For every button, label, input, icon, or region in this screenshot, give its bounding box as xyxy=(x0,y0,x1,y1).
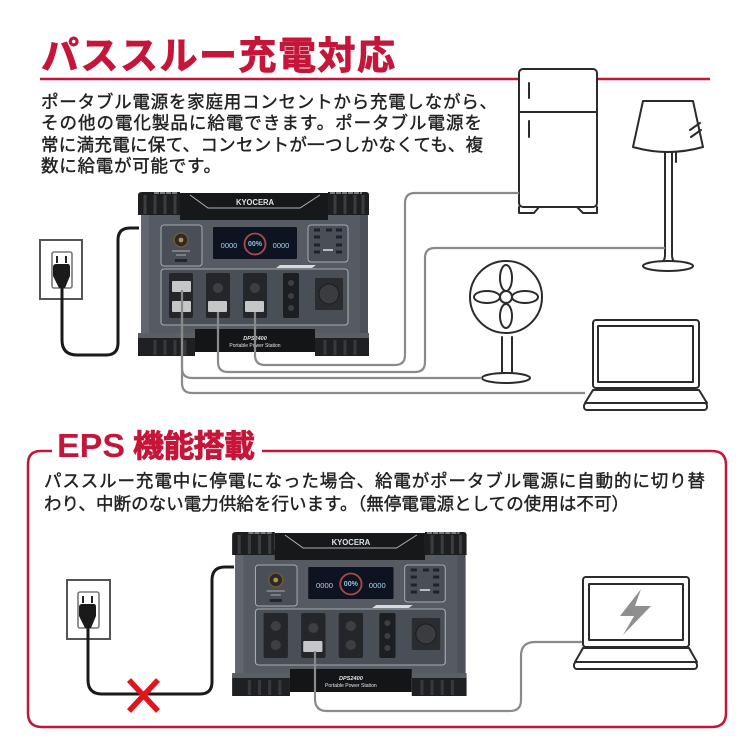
power station: upper xyxy=(138,192,369,356)
bottom base xyxy=(290,669,412,692)
icon: laptop xyxy=(584,320,707,410)
panel AC outlets xyxy=(255,609,445,665)
icon: refrigerator xyxy=(519,69,597,213)
intro text block xyxy=(41,92,497,176)
gray cord: lower xyxy=(315,642,583,711)
logo: KYOCERA xyxy=(332,538,370,547)
panel left xyxy=(255,565,297,606)
panel AC outlets xyxy=(161,269,348,325)
gray cords: upper xyxy=(182,193,665,393)
icon: floor lamp xyxy=(633,101,703,271)
EPS text block: パススルー充電中に停電になった場合、給電がポータブル電源に自動的に切り替 xyxy=(44,471,705,491)
logo: KYOCERA xyxy=(236,198,274,207)
power station: lower: 0000 xyxy=(369,581,386,590)
power station: lower: 0000 xyxy=(316,581,333,590)
title underline xyxy=(40,78,710,80)
display xyxy=(308,567,394,599)
EPS text block xyxy=(44,471,705,514)
title: pass-through charging: パススルー充電対応 xyxy=(41,36,395,78)
icon: red cross mark xyxy=(129,680,158,711)
EPS text block: わり、中断のない電力供給を行います。（無停電電源としての使用は不可） xyxy=(44,494,629,514)
icon: laptop with lightning bolt xyxy=(574,577,697,669)
display xyxy=(213,227,297,259)
plug xyxy=(303,641,322,652)
power station: upper: Portable Power Station xyxy=(229,343,281,349)
power station: lower: DPS2400 xyxy=(339,676,364,682)
bottom base xyxy=(195,329,315,352)
wall outlet: upper xyxy=(40,240,82,299)
top band xyxy=(275,533,425,560)
heading: EPS function xyxy=(57,427,255,464)
power station: upper: 0000 xyxy=(273,241,289,250)
housing xyxy=(141,210,368,338)
icon: electric fan xyxy=(470,261,542,383)
black cord: upper xyxy=(62,228,139,355)
heading: EPS function: EPS xyxy=(57,427,125,464)
intro text block: 数に給電が可能です。 xyxy=(41,156,221,176)
power station: lower: 00% xyxy=(344,581,359,588)
power station: upper: 0000 xyxy=(221,241,237,250)
power station: lower: Portable Power Station xyxy=(325,683,377,689)
panel right xyxy=(405,565,445,602)
housing xyxy=(235,550,466,678)
intro text block: ポータブル電源を家庭用コンセントから充電しながら、 xyxy=(41,92,497,112)
panel right xyxy=(308,225,348,262)
power station: lower xyxy=(232,532,467,696)
power station: upper: 00% xyxy=(248,241,263,248)
wall outlet: lower xyxy=(67,580,110,639)
plugs xyxy=(172,281,191,292)
intro text block: その他の電化製品に給電できます。ポータブル電源を xyxy=(41,113,482,133)
heading: EPS function: 機能搭載 xyxy=(133,429,255,464)
panel left xyxy=(161,225,202,266)
power station: upper: DPS2400 xyxy=(243,336,267,342)
intro text block: 常に満充電に保て、コンセントが一つしかなくても、複 xyxy=(41,135,484,155)
black cord: lower xyxy=(88,567,234,694)
EPS panel frame xyxy=(28,451,726,727)
top band xyxy=(180,193,328,220)
